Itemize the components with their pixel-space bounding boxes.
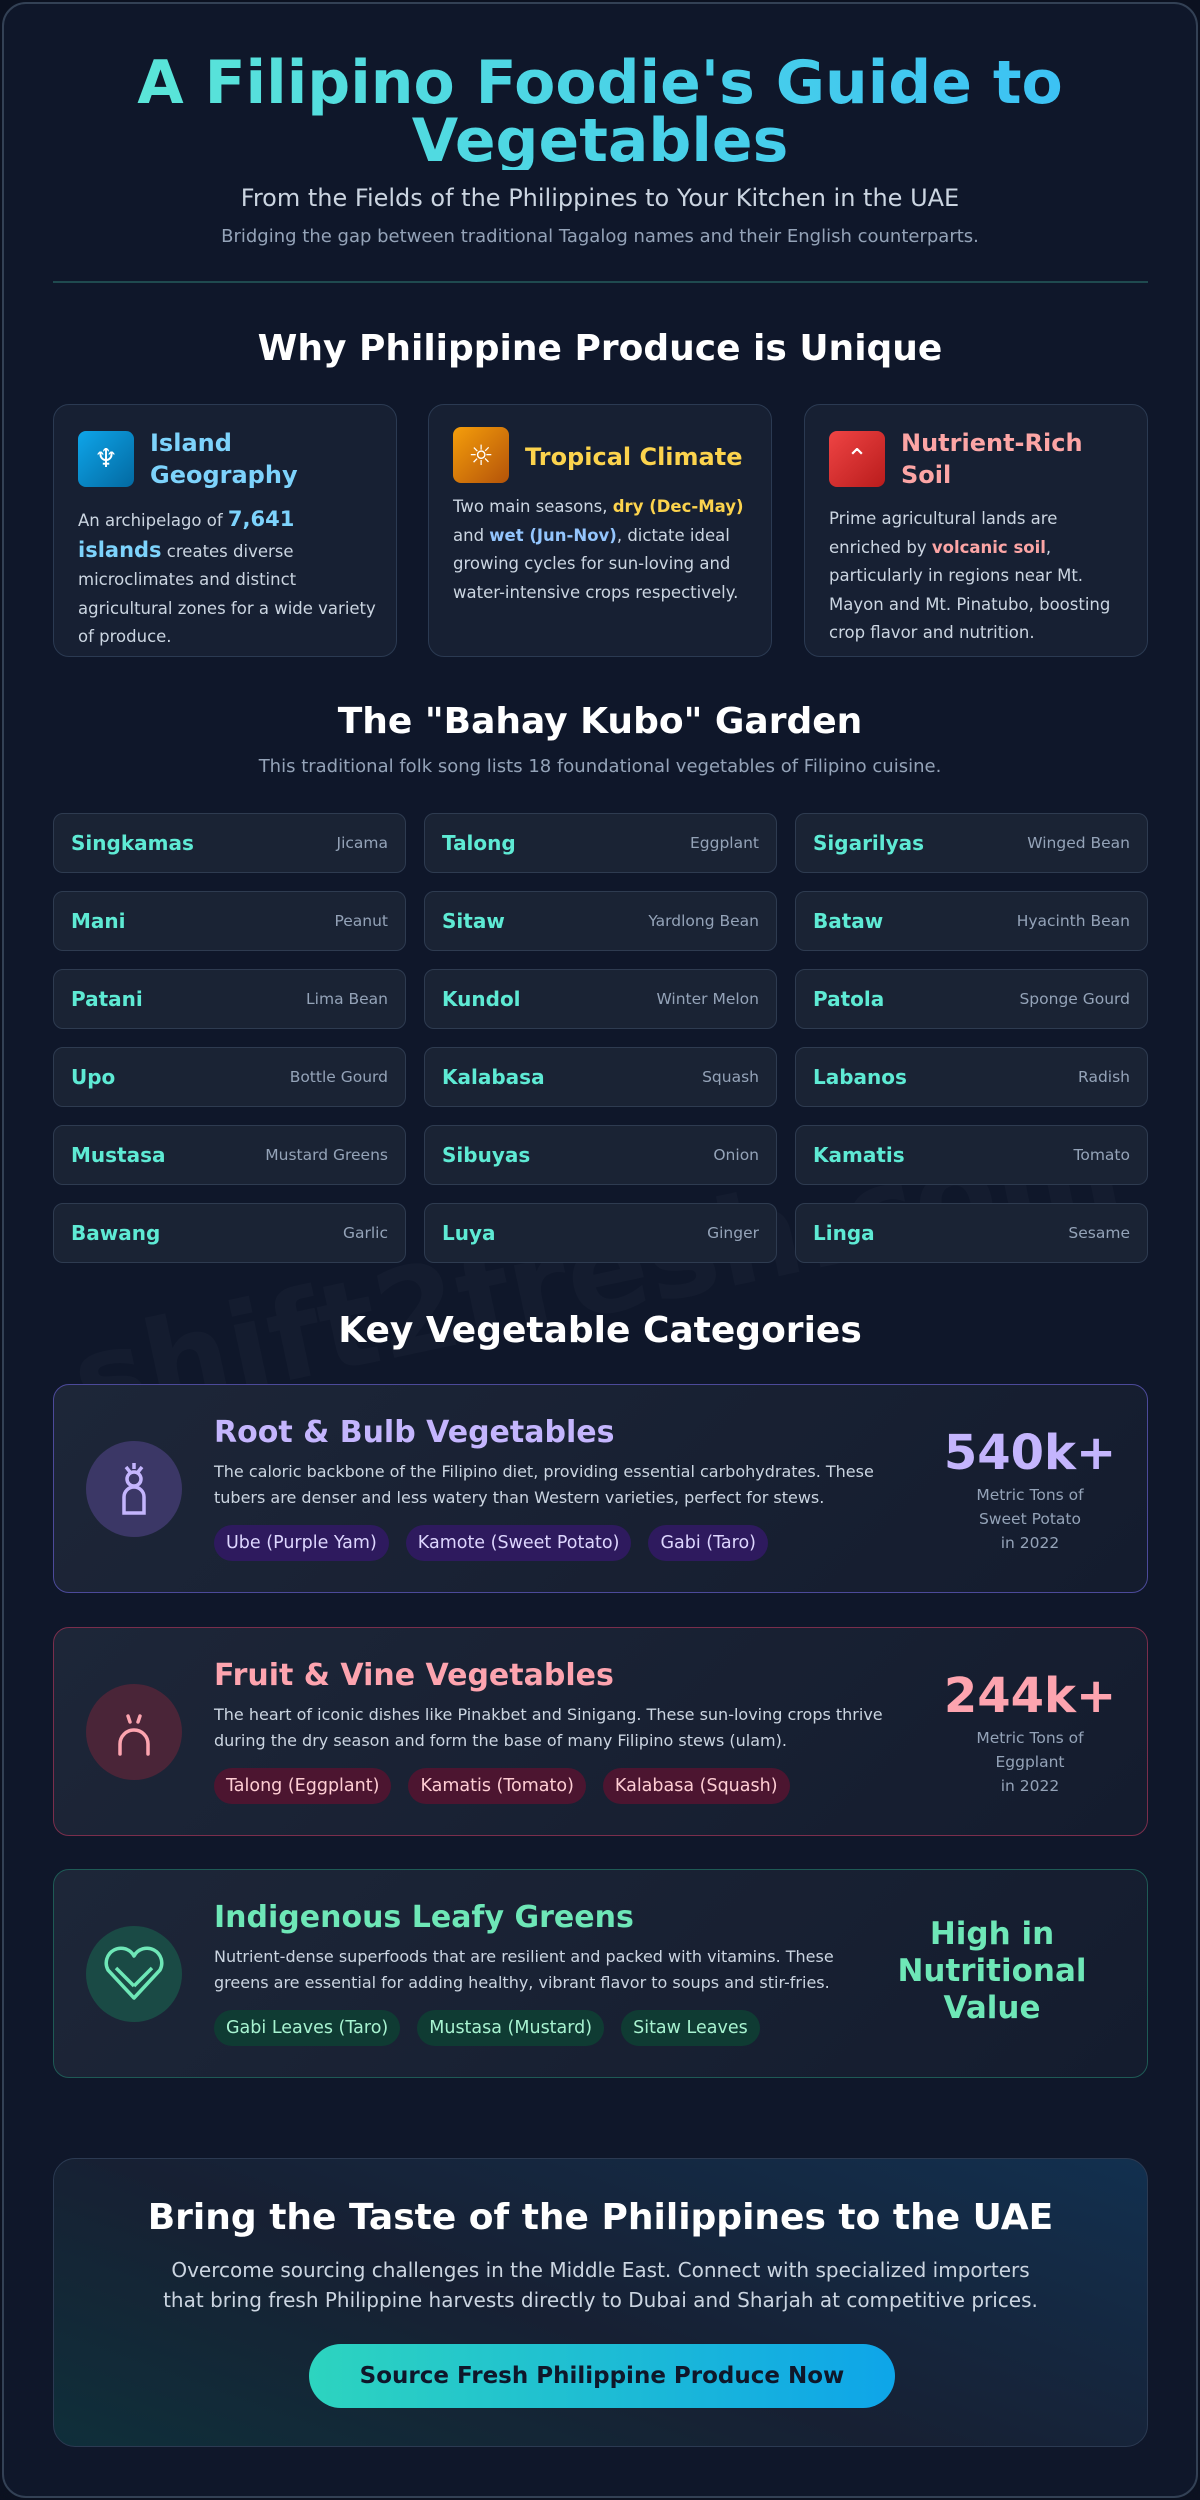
watermark: shift2fresh.com — [61, 1095, 1132, 1452]
tags: Talong (Eggplant) — [226, 1776, 379, 1796]
title: Indigenous Leafy Greens — [214, 1900, 634, 1935]
stat: Metric Tons of — [976, 1729, 1084, 1747]
card title — [150, 429, 298, 489]
vegetable grid: Peanut — [334, 912, 388, 930]
vegetable grid: Tomato — [1074, 1146, 1130, 1164]
icon: root — [86, 1441, 182, 1537]
stat: 540k+ — [944, 1425, 1116, 1481]
icon: chevrons: ⌃ — [846, 444, 868, 474]
button: Source Fresh Philippine Produce Now — [360, 2363, 844, 2389]
tags: Kamatis (Tomato) — [420, 1776, 574, 1796]
card title: Island — [150, 429, 232, 457]
panel: fruit & vine — [53, 1627, 1148, 1836]
tags — [214, 2010, 760, 2046]
description: The caloric backbone of the Filipino diet, providing essential carbohydrates. These tubers are denser and less watery than Western varieties, perfect for stews. — [214, 1462, 874, 1507]
vegetable grid: Sitaw — [442, 909, 505, 933]
vegetable grid: Sibuyas — [442, 1143, 530, 1167]
stat — [944, 1425, 1116, 1552]
subheading: This traditional folk song lists 18 foundational vegetables of Filipino cuisine. — [259, 756, 941, 777]
panel: island geography — [53, 404, 397, 657]
vegetable grid: Mustard Greens — [265, 1146, 388, 1164]
title — [137, 48, 1063, 176]
vegetable grid: Kalabasa — [442, 1065, 545, 1089]
vegetable grid: Onion — [713, 1146, 759, 1164]
tags: Gabi (Taro) — [660, 1533, 756, 1553]
vegetable grid: Patani — [71, 987, 143, 1011]
stat: Value — [944, 1990, 1040, 2026]
vegetable grid: Sesame — [1068, 1224, 1130, 1242]
icon: island — [78, 431, 134, 487]
tags: Ube (Purple Yam) — [226, 1533, 377, 1553]
panel: call to action — [53, 2158, 1148, 2447]
vegetable grid: Garlic — [343, 1224, 388, 1242]
tags: Mustasa (Mustard) — [429, 2018, 592, 2038]
cta text — [163, 2258, 1038, 2312]
cta heading: Bring the Taste of the Philippines to the UAE — [148, 2197, 1053, 2238]
tags — [214, 1768, 790, 1804]
panel: tropical climate — [428, 404, 772, 657]
subtitle: From the Fields of the Philippines to Your Kitchen in the UAE — [241, 184, 959, 212]
title: Fruit & Vine Vegetables — [214, 1658, 614, 1693]
vegetable grid: Lima Bean — [306, 990, 388, 1008]
vegetable grid: Sigarilyas — [813, 831, 924, 855]
stat: in 2022 — [1001, 1534, 1059, 1552]
cta text: Overcome sourcing challenges in the Middle East. Connect with specialized importers — [171, 2258, 1030, 2282]
icon: sun — [453, 427, 509, 483]
panel: nutrient-rich soil — [804, 404, 1148, 657]
tags: Sitaw Leaves — [633, 2018, 748, 2038]
stat: Sweet Potato — [979, 1510, 1081, 1528]
vegetable grid: Sponge Gourd — [1019, 990, 1130, 1008]
vegetable grid: Luya — [442, 1221, 496, 1245]
stat: 244k+ — [944, 1668, 1116, 1724]
heading: bahay kubo: The "Bahay Kubo" Garden — [338, 701, 862, 742]
panel: root & bulb — [53, 1384, 1148, 1593]
description: The heart of iconic dishes like Pinakbet and Sinigang. These sun-loving crops thrive during the dry season and form the base of many Filipino stews (ulam). — [214, 1705, 883, 1750]
stat: in 2022 — [1001, 1777, 1059, 1795]
icon: island: ♆ — [94, 444, 118, 474]
icon: chevrons — [829, 431, 885, 487]
stat: High in — [930, 1916, 1054, 1952]
vegetable grid: Winter Melon — [656, 990, 759, 1008]
title: Vegetables — [412, 106, 788, 176]
heading: why unique: Why Philippine Produce is Unique — [258, 328, 942, 369]
vegetable grid: Talong — [442, 831, 516, 855]
card title: Soil — [901, 461, 951, 489]
card title: Geography — [150, 461, 298, 489]
vegetable grid: Squash — [702, 1068, 759, 1086]
panel: leafy greens — [53, 1869, 1148, 2078]
vegetable grid: Mani — [71, 909, 126, 933]
stat — [897, 1916, 1087, 2026]
vegetable grid: Bataw — [813, 909, 883, 933]
icon: sun: ☼ — [468, 438, 494, 472]
tags: Kalabasa (Squash) — [615, 1776, 778, 1796]
vegetable grid: Jicama — [336, 834, 388, 852]
vegetable grid — [53, 813, 1148, 1263]
vegetable grid: Eggplant — [690, 834, 759, 852]
card title: Tropical Climate — [525, 443, 742, 471]
cta text: that bring fresh Philippine harvests directly to Dubai and Sharjah at competitive prices. — [163, 2288, 1038, 2312]
tags: Kamote (Sweet Potato) — [418, 1533, 619, 1553]
vegetable grid: Winged Bean — [1027, 834, 1130, 852]
vegetable grid: Bottle Gourd — [290, 1068, 388, 1086]
tags: Gabi Leaves (Taro) — [226, 2018, 388, 2038]
icon: fruit — [86, 1684, 182, 1780]
vegetable grid: Ginger — [707, 1224, 759, 1242]
vegetable grid: Yardlong Bean — [648, 912, 759, 930]
button — [309, 2344, 895, 2408]
heading: key categories: Key Vegetable Categories — [338, 1310, 862, 1351]
vegetable grid: Linga — [813, 1221, 875, 1245]
stat — [944, 1668, 1116, 1795]
vegetable grid: Kundol — [442, 987, 521, 1011]
vegetable grid: Mustasa — [71, 1143, 166, 1167]
tags — [214, 1525, 768, 1561]
stat: Eggplant — [995, 1753, 1065, 1771]
vegetable grid: Labanos — [813, 1065, 907, 1089]
vegetable grid: Upo — [71, 1065, 115, 1089]
vegetable grid: Singkamas — [71, 831, 194, 855]
card text: Prime agricultural lands are enriched by volcanic soil, particularly in regions near Mt. Mayon and Mt. Pinatubo, boosting crop flavor and nutrition. — [829, 509, 1110, 642]
card title: Nutrient-Rich — [901, 429, 1083, 457]
vegetable grid: Radish — [1078, 1068, 1130, 1086]
icon: heart leaf — [86, 1926, 182, 2022]
title: Root & Bulb Vegetables — [214, 1415, 614, 1450]
card text: Two main seasons, dry (Dec-May) and wet (Jun-Nov), dictate ideal growing cycles for sun-loving and water-intensive crops respectively. — [453, 497, 744, 602]
card title — [901, 429, 1083, 489]
vegetable grid: Bawang — [71, 1221, 160, 1245]
stat: Metric Tons of — [976, 1486, 1084, 1504]
title: A Filipino Foodie's Guide to — [137, 48, 1063, 118]
stat: Nutritional — [897, 1953, 1087, 1989]
vegetable grid: Kamatis — [813, 1143, 905, 1167]
card text: An archipelago of 7,641 islands creates diverse microclimates and distinct agricultural zones for a wide variety of produce. — [78, 507, 376, 646]
description: Nutrient-dense superfoods that are resilient and packed with vitamins. These greens are essential for adding healthy, vibrant flavor to soups and stir-fries. — [214, 1947, 834, 1992]
vegetable grid: Patola — [813, 987, 884, 1011]
tagline: Bridging the gap between traditional Tagalog names and their English counterparts. — [221, 226, 979, 247]
vegetable grid: Hyacinth Bean — [1017, 912, 1130, 930]
